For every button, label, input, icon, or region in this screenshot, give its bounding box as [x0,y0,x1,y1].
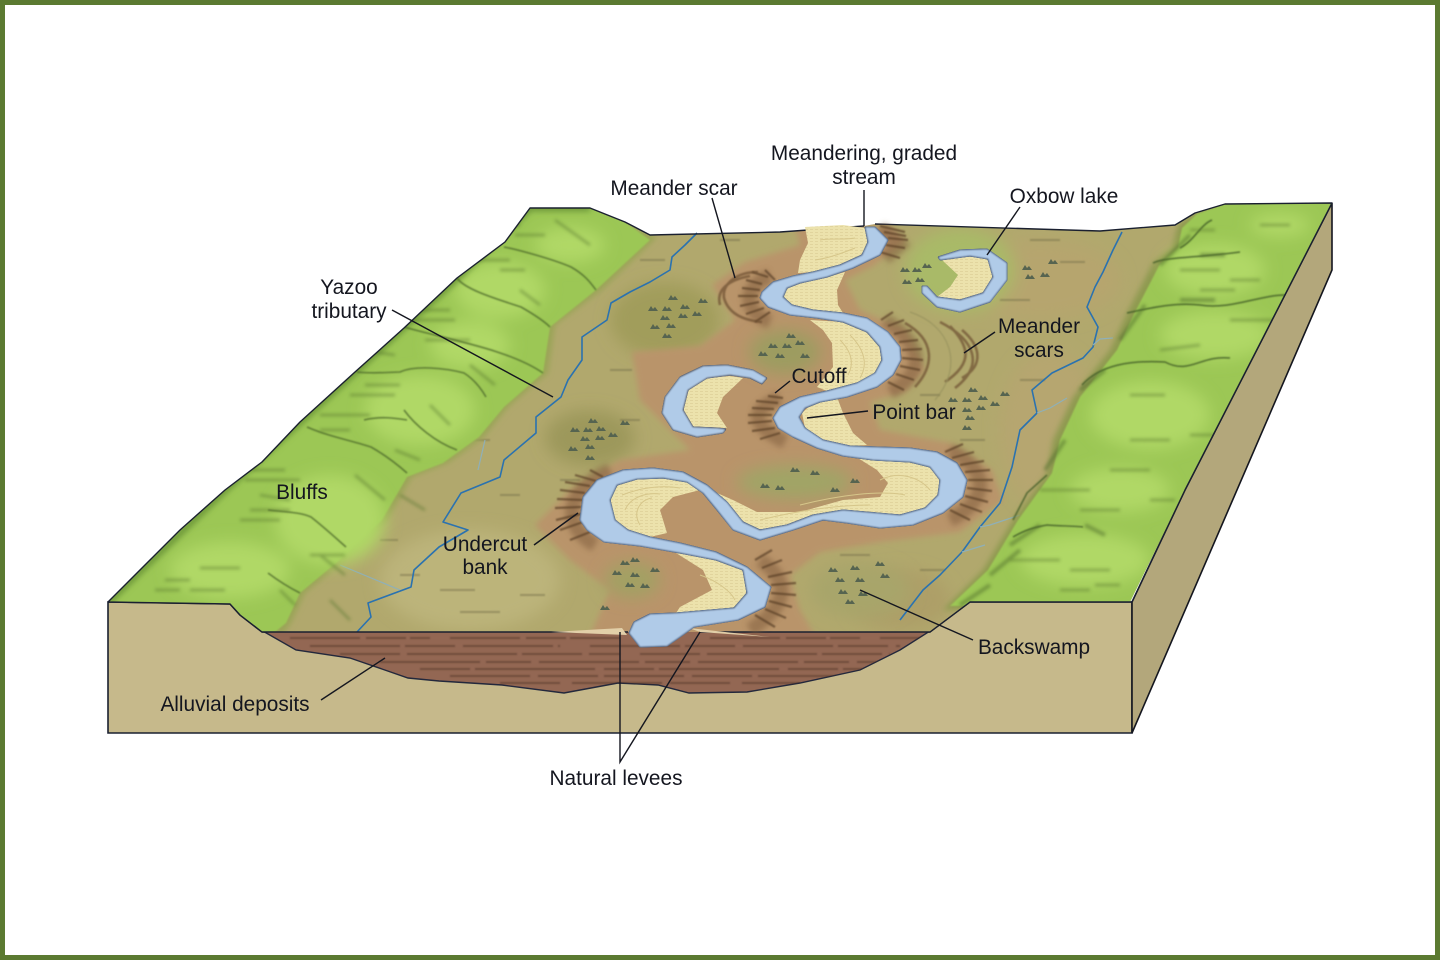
Yazoo tributary left [357,233,697,632]
label: alluvial deposits: Alluvial deposits [160,693,310,716]
cutoff channel [662,365,767,437]
tributaries [340,232,1122,632]
label: meandering, graded stream: stream [832,166,896,189]
leader: backswamp [860,590,973,640]
darker outer rim of left bluffs [108,208,590,602]
meander scar arcs [719,272,977,400]
bluff ridges left [268,247,596,593]
Yazoo tributary right [900,232,1122,620]
leader: oxbow lake [987,207,1020,255]
bluff ridges right [1013,220,1285,537]
label: Yazoo tributary: tributary [311,300,387,323]
valley floor surface [276,204,1330,632]
left bluffs [108,208,657,634]
label: bluffs: Bluffs [276,481,328,504]
label: undercut bank: bank [462,556,508,579]
green patches inside belt [604,326,860,604]
label: undercut bank: Undercut [443,533,527,556]
surface outline [108,203,1332,632]
right side face of block [1132,203,1332,733]
olive lowland tones [384,228,1014,628]
label: oxbow lake: Oxbow lake [1010,185,1118,208]
label: Yazoo tributary: Yazoo [320,276,378,299]
label: meander scar: Meander scar [610,177,738,200]
meander belt brown [535,226,1003,636]
label: meander scars: Meander [998,315,1080,338]
point bars [610,225,940,613]
leader: meander scar [712,198,735,278]
label: point bar: Point bar [872,401,956,424]
right bluffs [943,203,1332,610]
labels [160,142,1118,790]
natural levees [551,628,770,637]
leader: meandering stream [863,190,865,226]
leader: natural levees [620,632,700,762]
oxbow lake [922,249,1007,312]
leader: alluvial deposits [321,658,385,700]
main meandering river [580,227,967,647]
label: natural levees: Natural levees [550,767,682,790]
label: meander scars: scars [1014,339,1064,362]
valley dashes [380,240,1085,612]
leader: undercut bank [534,513,578,545]
leader lines [321,190,1020,762]
backswamp vegetation tufts [568,259,1058,610]
block diagram [108,203,1332,733]
front face of block [108,602,1132,733]
leader: Yazoo tributary [392,310,553,397]
undercut bank shading [572,228,980,630]
undercut bank hatching [555,226,993,627]
leader: meander scars [964,332,995,353]
point bar accretion lines [622,238,930,600]
alluvial deposits layer [261,630,930,693]
leader: cutoff [775,381,790,393]
label: backswamp: Backswamp [978,636,1090,659]
label: cutoff: Cutoff [791,365,847,388]
label: meandering, graded stream: Meandering, graded [771,142,957,165]
leader: point bar [807,411,868,418]
